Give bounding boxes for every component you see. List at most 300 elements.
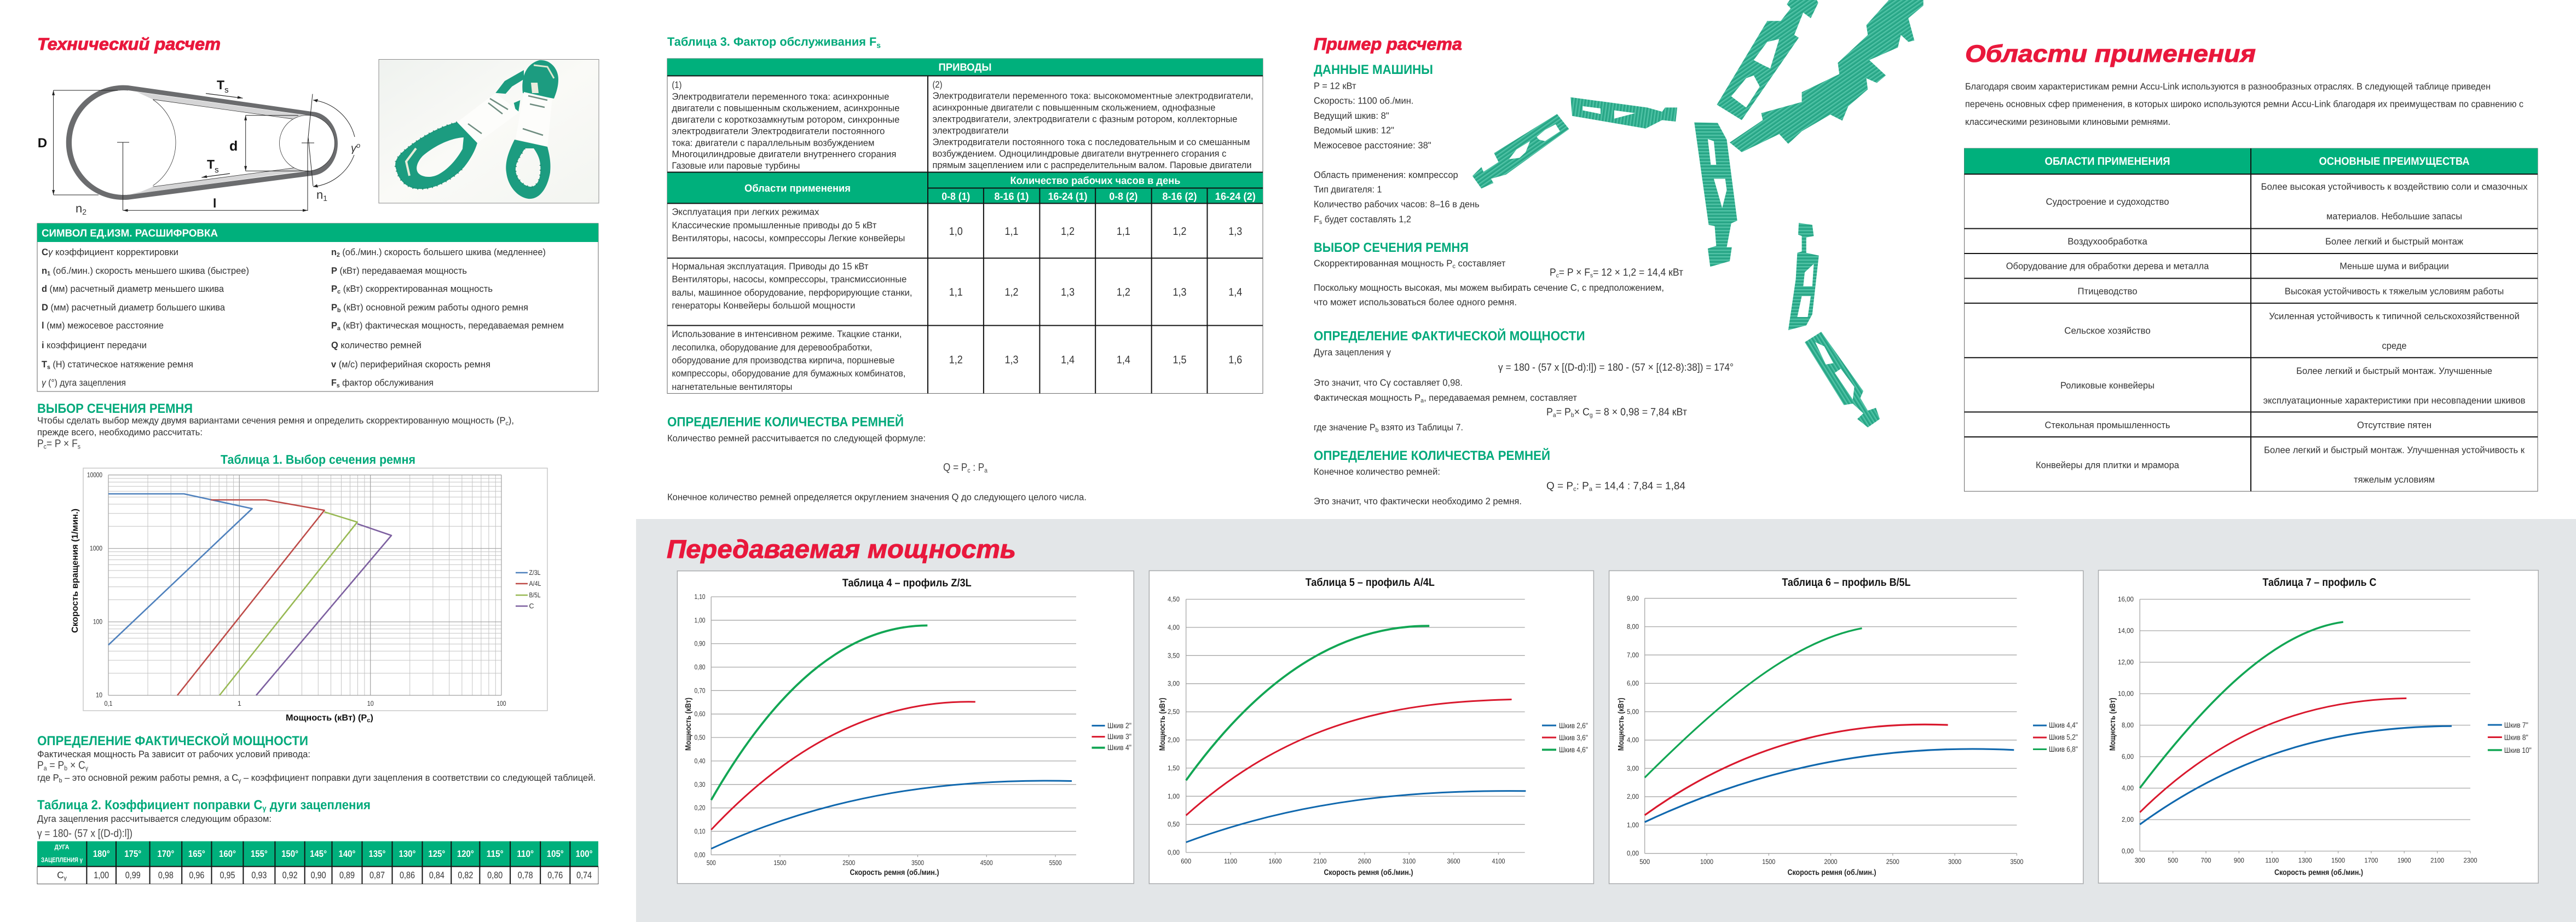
x axis ticks: 1100 [2265,857,2279,865]
text block: applications intro [1965,82,2523,127]
x axis ticks: 2500 [842,859,855,867]
y axis ticks: 0,70 [694,687,706,694]
column: advantages: Меньше шума и вибрации [2340,261,2449,271]
x axis ticks: 5500 [1049,859,1062,867]
left column of symbols: n [42,266,47,276]
table header: ОБЛАСТИ ПРИМЕНЕНИЯ [2045,155,2170,168]
text block: arc formula [37,814,272,840]
x axis ticks: 2500 [1886,858,1899,866]
text block: machine data: Межосевое расстояние: 38" [1314,140,1431,151]
legend: Шкив 3" [1107,732,1131,741]
y axis ticks: 1,00 [694,616,706,624]
curve: pulley 2 inch [711,781,1072,849]
text block: actual power: – это основной режим работы ремня, а C [62,773,238,783]
column: applications: Стекольная промышленность [2045,420,2170,430]
text block: machine data: будет составлять 1,2 [1322,214,1411,224]
left column of symbols: γ (°) дуга зацепления [42,378,126,388]
text block: section choice intro: c [44,442,47,450]
values row: 0,98 [158,870,174,880]
header: applications: Области применения [744,183,851,194]
text block: actual power: a [44,764,47,772]
x axis ticks: 1100 [1224,857,1237,865]
values row: 0,86 [400,870,415,880]
row: normal duty: 1,1 [949,286,963,298]
chart: table 7 profile C [2099,571,2538,883]
row: light duty: Эксплуатация при легких режимах [672,207,819,217]
column: applications: Птицеводство [2078,286,2137,296]
table: applications and advantages [1964,148,2538,491]
legend: Шкив 7" [2504,721,2528,729]
values row: C [57,870,63,880]
column: advantages: Отсутствие пятен [2357,420,2431,430]
header row: 170° [157,849,175,859]
y axis labels [87,471,102,699]
left column of symbols: (об./мин.) скорость меньшего шкива (быстрее) [50,266,249,276]
values row: 0,93 [251,870,267,880]
diagram: belt drive: D [38,136,47,151]
y axis ticks: 10,00 [2118,690,2134,698]
y axis ticks: 0,60 [694,710,706,718]
text block: section choice intro: прежде всего, необходимо рассчитать: [37,427,203,437]
text block: number of belts: Это значит, что фактически необходимо 2 ремня. [1314,496,1522,506]
legend: Z/3L [529,569,541,577]
drive type 2 text: (2) [933,79,943,90]
y axis ticks: 1,50 [1168,764,1180,772]
drive type 2 text: прямым зацеплением или с распределительным валом. Паровые двигатели [933,160,1251,170]
drive type 1 text: (1) [672,80,681,90]
row: intensive duty: нагнетательные вентиляторы [672,382,792,392]
x axis ticks [2135,857,2477,865]
text block: belt section: = P × F [1559,267,1590,278]
text block: actual power: γ = 180 - (57 x [(D-d):l]) = 180 - (57 × [(12-8):38]) = 174° [1498,362,1734,373]
y axis ticks [1627,595,1639,857]
diagram: belt drive: n [76,201,82,215]
y axis ticks: 0,20 [694,804,706,812]
left column of symbols: 1 [47,270,50,277]
y axis ticks: 16,00 [2118,596,2134,603]
header row: 125° [428,849,446,859]
header row: 175° [124,849,141,859]
legend: B/5L [529,591,541,599]
left column of symbols: s [47,364,50,371]
left column of symbols: i коэффициент передачи [42,340,147,350]
link right vertical [1788,223,1819,330]
diagram: belt drive [38,78,360,216]
text block: machine data: F [1314,214,1319,224]
table 2: arc correction coefficient [37,841,598,884]
decorative: belt links [1472,0,1924,428]
header row: 160° [219,849,236,859]
y axis ticks: 2,50 [1168,708,1180,716]
header row: 120° [457,849,474,859]
y axis ticks: 4,50 [1168,596,1180,603]
text block: belt section [1314,258,1683,307]
row: normal duty: 1,2 [1117,286,1130,298]
y axis title: Скорость вращения (1/мин.) [71,509,80,633]
heading: table 3: Таблица 3. Фактор обслуживания F [667,35,879,49]
column: applications [2006,197,2209,470]
series: C [256,524,391,695]
hours column headers: 16-24 (1) [1048,191,1088,203]
photo: green link belts [379,59,599,203]
x axis ticks: 600 [1181,857,1191,865]
values row: 0,96 [189,870,204,880]
x axis ticks: 700 [2200,857,2211,865]
heading: belt section choice: ВЫБОР СЕЧЕНИЯ РЕМНЯ [37,401,193,416]
y axis ticks: 0,50 [1168,821,1180,828]
x axis ticks: 500 [1639,858,1650,866]
row: light duty: 1,1 [1117,226,1130,238]
right column of symbols: b [337,307,341,314]
legend [2488,721,2532,754]
text block: actual power: – коэффициент поправки дуги зацепления в соответствии со следующей таблицей. [241,773,596,783]
x axis ticks: 3500 [911,859,924,867]
text block: belt section: составляет [1456,258,1506,268]
text block: section choice intro: P [37,438,44,450]
right column of symbols: P [331,302,337,313]
heading: actual power: ОПРЕДЕЛЕНИЕ ФАКТИЧЕСКОЙ МОЩНОСТИ [37,733,308,748]
right column of symbols: (кВт) скорректированная мощность [340,284,493,294]
left column of symbols: Cγ коэффициент корректировки [42,247,178,257]
text block: section choice intro: = P × F [47,438,78,450]
heading: belt section: ВЫБОР СЕЧЕНИЯ РЕМНЯ [1314,240,1469,255]
left column of symbols: (Н) статическое натяжение ремня [50,359,193,370]
header row: 135° [369,849,386,859]
title: transmitted power: Передаваемая мощность [667,534,1016,563]
row: intensive duty: 1,6 [1228,354,1242,366]
hours column headers [942,191,1256,203]
x axis ticks: 1500 [773,859,786,867]
y axis ticks: 3,00 [1168,680,1180,688]
text block: number of belts: Q = P [1546,481,1573,492]
y axis ticks: 4,00 [1168,624,1180,631]
column: applications: Оборудование для обработки дерева и металла [2006,261,2209,271]
text block: number of belts: Количество ремней рассчитывается по следующей формуле: [667,433,926,443]
drive type 1 text: двигатели с повышенным скольжением, асинхронные [672,103,899,113]
text block: section choice intro [37,415,514,450]
header row: 165° [188,849,205,859]
link bottom right [1805,332,1880,428]
text block: machine data: Область применения: компрессор [1314,170,1458,180]
left column of symbols [42,247,249,388]
heading: table 2: дуги зацепления [267,798,371,812]
diagram: belt drive: d [229,139,238,154]
panel: calculation example [1314,34,1734,506]
x axis ticks: 1700 [2364,857,2378,865]
heading: machine data: ДАННЫЕ МАШИНЫ [1314,62,1433,77]
text block: section choice intro: c [506,420,509,427]
drive type 2 text: электродвигатели [933,125,1008,136]
header row: 150° [281,849,298,859]
text block: arc formula: Дуга зацепления рассчитывается следующим образом: [37,814,272,824]
right column of symbols: P [331,320,337,331]
heading: table 3: s [876,41,881,50]
header row: 100° [576,849,593,859]
y axis ticks: 9,00 [1627,595,1639,602]
x axis ticks: 1600 [1269,857,1282,865]
column: advantages: материалов. Небольшие запасы [2326,211,2462,221]
row: intensive duty: Использование в интенсивном режиме. Ткацкие станки, [672,329,902,339]
y axis ticks: 8,00 [1627,623,1639,631]
x axis ticks: 1500 [2331,857,2345,865]
text block: belt section: P [1550,267,1557,278]
row: intensive duty: 1,2 [949,354,963,366]
right column of symbols: (об./мин.) скорость большего шкива (медленнее) [340,247,546,257]
values row: 0,90 [311,870,326,880]
text block: actual power: Дуга зацепления γ [1314,347,1391,358]
x axis ticks: 1900 [2398,857,2411,865]
column: applications: Роликовые конвейеры [2060,380,2155,391]
y axis labels: 10000 [87,471,102,479]
text block: belt section: c [1452,263,1456,269]
text block: belt section: Скорректированная мощность P [1314,258,1454,268]
chart title: Таблица 6 – профиль B/5L [1782,577,1910,589]
heading: number of belts: ОПРЕДЕЛЕНИЕ КОЛИЧЕСТВА РЕМНЕЙ [667,414,904,430]
values row: 0,92 [282,870,298,880]
y axis labels: 10 [96,691,102,699]
right column of symbols: s [337,382,340,389]
text block: number of belts: a [1589,486,1593,493]
row: light duty: 1,2 [1173,226,1187,238]
left column of symbols: l (мм) межосевое расстояние [42,320,164,331]
text block: number of belts: : P [971,462,984,474]
text block: actual power: a [1420,397,1424,404]
right column of symbols: F [331,378,337,388]
legend [516,569,541,610]
y axis ticks: 0,80 [694,664,706,671]
text block: applications intro: Благодаря своим характеристикам ремни Accu-Link используются в разнообразных отраслях. В следующей таблице приведен [1965,82,2491,92]
heading: table 2: γ [262,804,267,812]
text block: actual power: × C [1574,407,1590,418]
hours column headers: 0-8 (2) [1109,191,1137,203]
right column of symbols: a [337,325,341,332]
text block: actual power: = 8 × 0,98 = 7,84 кВт [1593,407,1687,418]
y axis labels: 100 [93,618,102,625]
row: light duty: Классические промышленные приводы до 5 кВт [672,220,877,231]
x axis labels: 10 [367,700,374,707]
left column of symbols: T [42,359,48,370]
column: applications: Конвейеры для плитки и мрамора [2036,460,2180,470]
link top [1717,0,1818,120]
text block: actual power: b [1376,427,1378,434]
text block: machine data: Скорость: 1100 об./мин. [1314,96,1413,106]
x axis title: Скорость ремня (об./мин.) [1324,868,1413,877]
curve: pulley 7 inch [2140,726,2452,825]
y axis ticks: 14,00 [2118,627,2134,635]
y axis ticks: 0,90 [694,640,706,648]
y axis ticks: 0,10 [694,827,706,835]
y axis ticks: 5,00 [1627,708,1639,716]
y axis ticks: 6,00 [2122,753,2134,760]
right column of symbols: n [331,247,337,257]
text block: actual power: a [1553,412,1556,419]
row: light duty: 1,3 [1228,226,1242,238]
row: intensive duty: компрессоры, оборудование для бумажных комбинатов, [672,368,905,379]
text block: actual power [1314,347,1734,434]
y axis ticks: 3,50 [1168,652,1180,659]
heading: table 2: Таблица 2. Коэффициент поправки C [37,798,281,812]
text block: machine data: P = 12 кВт [1314,80,1356,91]
legend: Шкив 6,8" [2049,745,2078,753]
x axis ticks: 4500 [980,859,993,867]
x axis ticks: 900 [2234,857,2244,865]
x axis title: Скорость ремня (об./мин.) [2274,868,2363,877]
header row: 110° [517,849,534,859]
values row: 0,76 [547,870,563,880]
row: normal duty: 1,4 [1228,286,1242,298]
chart: table 4 profile Z/3L [677,571,1134,884]
x axis ticks: 3500 [2010,858,2023,866]
drive type 2 text: асинхронные двигатели с повышенным скольжением, однофазные [933,102,1215,113]
y axis ticks: 1,10 [694,593,706,601]
text block: number of belts: c [967,466,971,474]
header row: 140° [338,849,356,859]
x axis title: ) [371,713,373,723]
table 3: service factor [667,59,1263,394]
y axis ticks: 7,00 [1627,651,1639,659]
diagram: belt drive: T [217,78,224,92]
y axis ticks: 1,00 [1627,821,1639,829]
text block: number of belts: a [984,466,987,474]
text block: actual power [37,749,596,784]
legend: Шкив 2" [1107,721,1131,730]
text block: machine data: Ведомый шкив: 12" [1314,125,1394,136]
text block: arc formula: γ = 180- (57 x [(D-d):l]) [37,828,132,840]
row: normal duty: 1,3 [1173,286,1187,298]
text block: machine data: s [1319,219,1322,226]
values row [57,870,592,881]
x axis ticks: 2600 [1358,857,1371,865]
values row: 0,87 [369,870,385,880]
header row: 145° [310,849,327,859]
legend: Шкив 4" [1107,743,1131,752]
curve: pulley 2.6 inch [1186,791,1526,842]
text block: belt section: что может использоваться более одного ремня. [1314,297,1517,307]
text block: actual power: g [1590,412,1593,419]
row: normal duty: Нормальная эксплуатация. Приводы до 15 кВт [672,261,869,272]
header: drives: ПРИВОДЫ [938,62,992,73]
curve: pulley 10 inch [2140,622,2343,788]
header: hours per day: Количество рабочих часов в день [1010,175,1180,187]
x axis ticks: 1000 [1700,858,1713,866]
drive type 1 text: Газовые или паровые турбины [672,160,800,171]
drive type 2 text: возбуждением. Одноцилиндровые двигатели внутреннего сгорания с [933,148,1227,159]
text block: actual power: b [64,764,67,772]
text block: actual power: × C [67,759,85,771]
header row: 180° [93,849,110,859]
diagram: belt drive: γ [351,142,356,154]
text block: number of belts: = 14,4 : 7,84 = 1,84 [1592,481,1685,492]
right column of symbols: (кВт) фактическая мощность, передаваемая ремнем [340,320,564,331]
right column of symbols: (кВт) основной режим работы одного ремня [341,302,528,313]
values row: 0,84 [429,870,444,880]
text block: number of belts: c [1573,486,1576,493]
text block: actual power: где P [37,773,60,783]
diagram: belt drive: s [224,85,229,95]
row: normal duty: Вентиляторы, насосы, компрессоры, трансмиссионные [672,274,906,285]
text block: applications intro: классическими резиновыми клиновыми ремнями. [1965,117,2170,127]
legend [1091,721,1131,752]
right column of symbols: 2 [337,252,340,258]
x axis ticks: 1500 [1762,858,1775,866]
drive type 2 text [933,79,1254,170]
hours column headers: 8-16 (1) [994,191,1029,203]
panel: service factor [667,35,1263,503]
values row: 0,95 [220,870,235,880]
x axis labels: 0,1 [104,700,113,707]
x axis ticks [1181,857,1505,865]
x axis ticks: 3600 [1447,857,1460,865]
legend: Шкив 4,6" [1559,745,1588,754]
text block: actual power: Это значит, что Сγ составляет 0,98. [1314,378,1463,388]
header row [41,843,593,864]
curve: pulley 4 inch [711,625,927,800]
curve: pulley 8 inch [2140,698,2406,812]
text block: belt section: = 12 × 1,2 = 14,4 кВт [1593,267,1683,278]
chart: belt section selection [71,468,547,724]
heading: number of belts: ОПРЕДЕЛЕНИЕ КОЛИЧЕСТВА РЕМНЕЙ [1314,448,1550,463]
header row: 115° [487,849,504,859]
drive type 1 text: двигатели с короткозамкнутым ротором, синхронные [672,114,899,125]
curve: pulley 4.6 inch [1186,626,1429,780]
y axis ticks: 2,00 [2122,816,2134,823]
row: intensive duty: 1,4 [1061,354,1075,366]
table header: СИМВОЛ ЕД.ИЗМ. РАСШИФРОВКА [42,228,218,239]
column: applications: Сельское хозяйство [2064,325,2151,336]
title: technical calculation: Технический расчет [37,34,221,54]
text block: number of belts: : P [1576,481,1589,492]
panel: transmitted power [636,519,2576,922]
text block: actual power: P [37,759,44,771]
right column of symbols: c [337,289,340,295]
diagram: belt drive: 2 [82,208,86,216]
x axis ticks: 3100 [1402,857,1416,865]
x axis ticks: 4100 [1492,857,1505,865]
chart title: Таблица 7 – профиль C [2262,577,2376,589]
legend: Шкив 3,6" [1559,733,1588,742]
legend: Шкив 5,2" [2049,733,2078,741]
panel: applications [1964,41,2538,491]
row: intensive duty: 1,4 [1117,354,1130,366]
curve: pulley 6.8 inch [1645,629,1862,777]
text block: actual power: γ [238,777,241,784]
row: light duty: 1,1 [1005,226,1018,238]
left column of symbols: d (мм) расчетный диаметр меньшего шкива [42,284,224,294]
curve: pulley 3 inch [711,702,975,830]
y axis ticks: 2,00 [1168,736,1180,744]
text block: actual power: взято из Таблицы 7. [1378,422,1463,433]
y axis ticks: 4,00 [1627,736,1639,744]
header row: ДУГА [55,843,70,851]
table header [2045,155,2470,168]
values row: 0,74 [576,870,592,880]
x axis ticks: 500 [707,859,716,867]
x axis ticks: 2100 [2430,857,2444,865]
y axis title: Мощность (кВт) [2109,698,2117,751]
heading: table 1: Таблица 1. Выбор сечения ремня [221,452,415,466]
drive type 1 text: Электродвигатели переменного тока: асинхронные [672,91,889,102]
x axis ticks: 1300 [2298,857,2312,865]
hours column headers: 0-8 (1) [942,191,970,203]
x axis title: Мощность (кВт) (P [286,713,365,723]
legend: Шкив 4,4" [2049,721,2078,729]
title: calculation example: Пример расчета [1314,34,1462,54]
text block: applications intro: перечень основных сфер применения, в которых широко используются ремни Accu-Link благодаря их преимуществам по сравнению с [1965,99,2523,110]
header row: ЗАЦЕПЛЕНИЯ γ [41,856,83,864]
text block: section choice intro: Чтобы сделать выбор между двумя вариантами сечения ремня и определить скорректированную мощность (P [37,415,518,426]
row: light duty: 1,0 [949,226,963,238]
link center vertical [1694,123,1737,267]
